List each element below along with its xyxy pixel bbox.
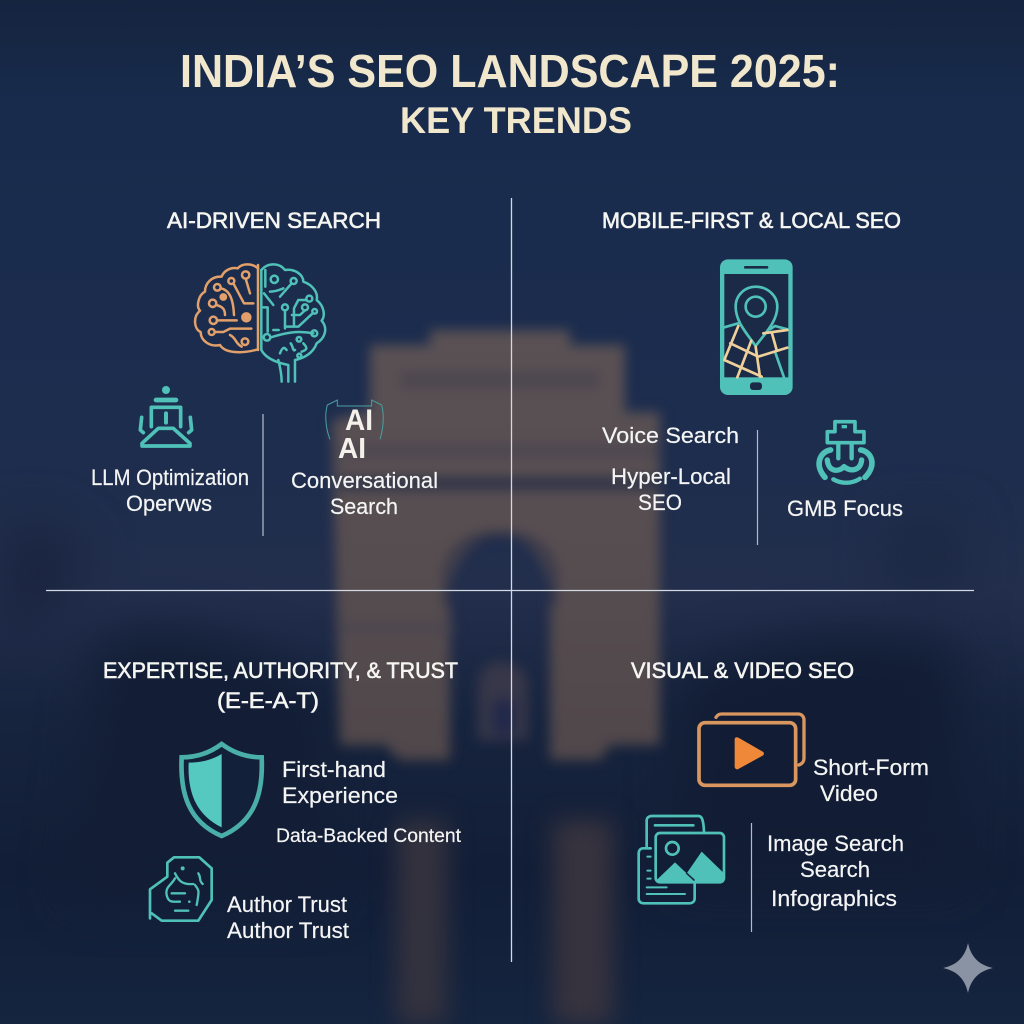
heading: visual and video SEO: VISUAL & VIDEO SEO	[631, 658, 854, 683]
heading: E-E-A-T: EXPERTISE, AUTHORITY, & TRUST	[103, 658, 458, 683]
icon: author trust badge	[150, 857, 212, 921]
icon: AI conversational bubble: AI	[338, 433, 366, 465]
heading: E-E-A-T: (E-E-A-T)	[217, 688, 319, 713]
text: LLM optimization: LLM Optimization	[91, 465, 249, 490]
text: image search and infographics	[767, 831, 904, 911]
icon: video play cards	[699, 714, 804, 785]
heading: mobile-first and local SEO: MOBILE-FIRST & LOCAL SEO	[602, 208, 901, 233]
text: conversational search	[291, 468, 438, 519]
text: data-backed content: Data-Backed Content	[276, 826, 462, 847]
heading: E-E-A-T	[103, 658, 458, 713]
text: first-hand experience	[282, 757, 398, 808]
text: conversational search: Search	[330, 494, 398, 519]
panel: visual and video SEO	[631, 658, 929, 932]
quadrant dividers	[46, 198, 974, 962]
icon: GMB anchor	[819, 422, 872, 483]
divider	[750, 823, 752, 932]
icon: AI conversational bubble: AI	[345, 404, 373, 437]
icon: image and document cards	[639, 816, 724, 903]
text: voice search and hyper-local SEO	[602, 423, 739, 515]
text: conversational search: Conversational	[291, 468, 438, 493]
text: author trust: Author Trust	[227, 918, 349, 943]
divider	[756, 430, 758, 545]
title: KEY TRENDS	[400, 100, 632, 141]
icon: shield	[181, 744, 262, 836]
icon: LLM chip	[140, 386, 192, 446]
text: LLM optimization	[91, 465, 249, 516]
text: voice search and hyper-local SEO: SEO	[638, 490, 682, 515]
title	[180, 45, 840, 141]
icon: circuit brain	[195, 264, 325, 382]
text: image search and infographics: Image Search	[767, 831, 904, 856]
text: author trust	[227, 892, 349, 943]
title: INDIA’S SEO LANDSCAPE 2025:	[180, 45, 840, 97]
text: voice search and hyper-local SEO: Hyper-Local	[611, 464, 731, 489]
icon: phone with map pin	[720, 259, 793, 395]
divider	[262, 414, 264, 536]
text: image search and infographics: Search	[800, 857, 870, 882]
text: image search and infographics: Infographics	[771, 886, 897, 911]
text: short-form video: Short-Form	[813, 755, 929, 780]
icon: sparkle watermark	[943, 943, 993, 993]
panel: mobile-first and local SEO	[602, 208, 903, 545]
text: voice search and hyper-local SEO: Voice Search	[602, 423, 739, 448]
icon: AI conversational bubble	[326, 400, 383, 465]
text: LLM optimization: Opervws	[126, 491, 212, 516]
text: GMB focus: GMB Focus	[787, 496, 903, 521]
heading: AI-driven search: AI-DRIVEN SEARCH	[167, 208, 381, 233]
text: first-hand experience: First-hand	[282, 757, 386, 782]
text: short-form video	[813, 755, 929, 806]
text: author trust: Author Trust	[227, 892, 347, 917]
panel: expertise, authority and trust	[103, 658, 462, 943]
text: first-hand experience: Experience	[282, 783, 398, 808]
text: short-form video: Video	[820, 781, 878, 806]
panel: AI-driven search	[91, 208, 438, 536]
